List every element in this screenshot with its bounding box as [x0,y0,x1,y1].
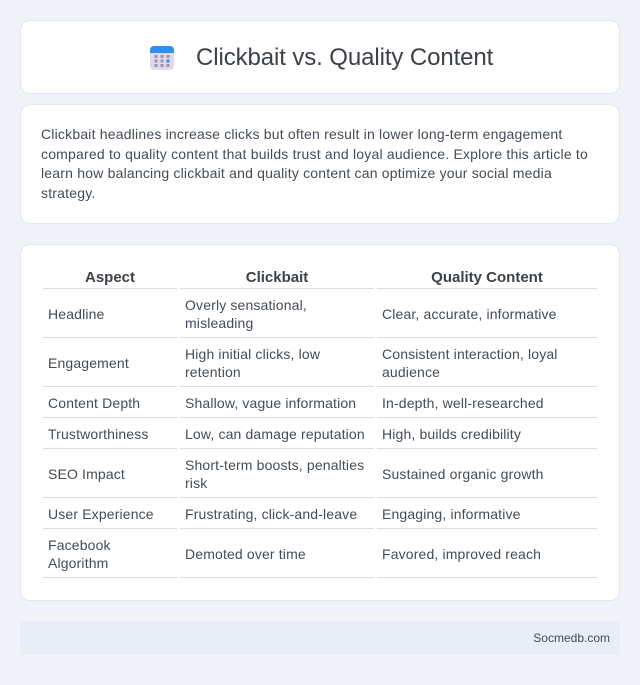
row: Trustworthiness: Low, can damage reputation [185,426,365,442]
row: Trustworthiness: High, builds credibility [382,426,521,442]
title card [20,20,620,94]
row: Engagement [48,346,558,380]
table header: Aspect [85,269,135,286]
row: Facebook Algorithm: Algorithm [48,555,108,571]
row: User Experience: Frustrating, click-and-leave [185,506,357,522]
row: Facebook Algorithm: Favored, improved reach [382,546,541,562]
table header: Clickbait [246,269,308,286]
intro text: compared to quality content that builds trust and loyal audience. Explore this article to [41,146,588,162]
row: SEO Impact: risk [185,475,207,491]
row: Headline: misleading [185,315,253,331]
row: User Experience: Engaging, informative [382,506,521,522]
row: Engagement: Consistent interaction, loyal [382,346,558,362]
footer source text: Socmedb.com [533,631,610,645]
row: SEO Impact: Short-term boosts, penalties [185,457,364,473]
row: Facebook Algorithm: Demoted over time [185,546,306,562]
row: Trustworthiness: Trustworthiness [48,426,149,442]
row: Content Depth: Content Depth [48,395,140,411]
intro text [41,126,588,201]
row: SEO Impact: Sustained organic growth [382,466,544,482]
row: Headline: Headline [48,306,104,322]
row: Engagement: audience [382,364,440,380]
footer bar [20,621,620,655]
row: Headline [48,297,557,331]
row: SEO Impact [48,457,544,491]
row: Engagement: High initial clicks, low [185,346,320,362]
icon: calendar [150,46,174,70]
title: Clickbait vs. Quality Content [196,44,493,71]
row: Headline: Overly sensational, [185,297,307,313]
row: Engagement: Engagement [48,355,129,371]
row: Content Depth: Shallow, vague information [185,395,356,411]
row: SEO Impact: SEO Impact [48,466,125,482]
panel: introduction [20,104,620,224]
table header [85,269,543,286]
intro text: learn how balancing clickbait and quality content can optimize your social media [41,165,552,181]
row: Engagement: retention [185,364,241,380]
comparison table [43,269,597,578]
row: Facebook Algorithm [48,537,541,571]
row: User Experience: User Experience [48,506,154,522]
row: Content Depth: In-depth, well-researched [382,395,544,411]
table header: Quality Content [431,269,543,286]
row: Content Depth [48,395,544,411]
row: User Experience [48,506,521,522]
intro text: Clickbait headlines increase clicks but often result in lower long-term engagement [41,126,562,142]
row: Facebook Algorithm: Facebook [48,537,111,553]
row: Trustworthiness [48,426,521,442]
row: Headline: Clear, accurate, informative [382,306,557,322]
panel: comparison table [20,244,620,601]
intro text: strategy. [41,185,95,201]
